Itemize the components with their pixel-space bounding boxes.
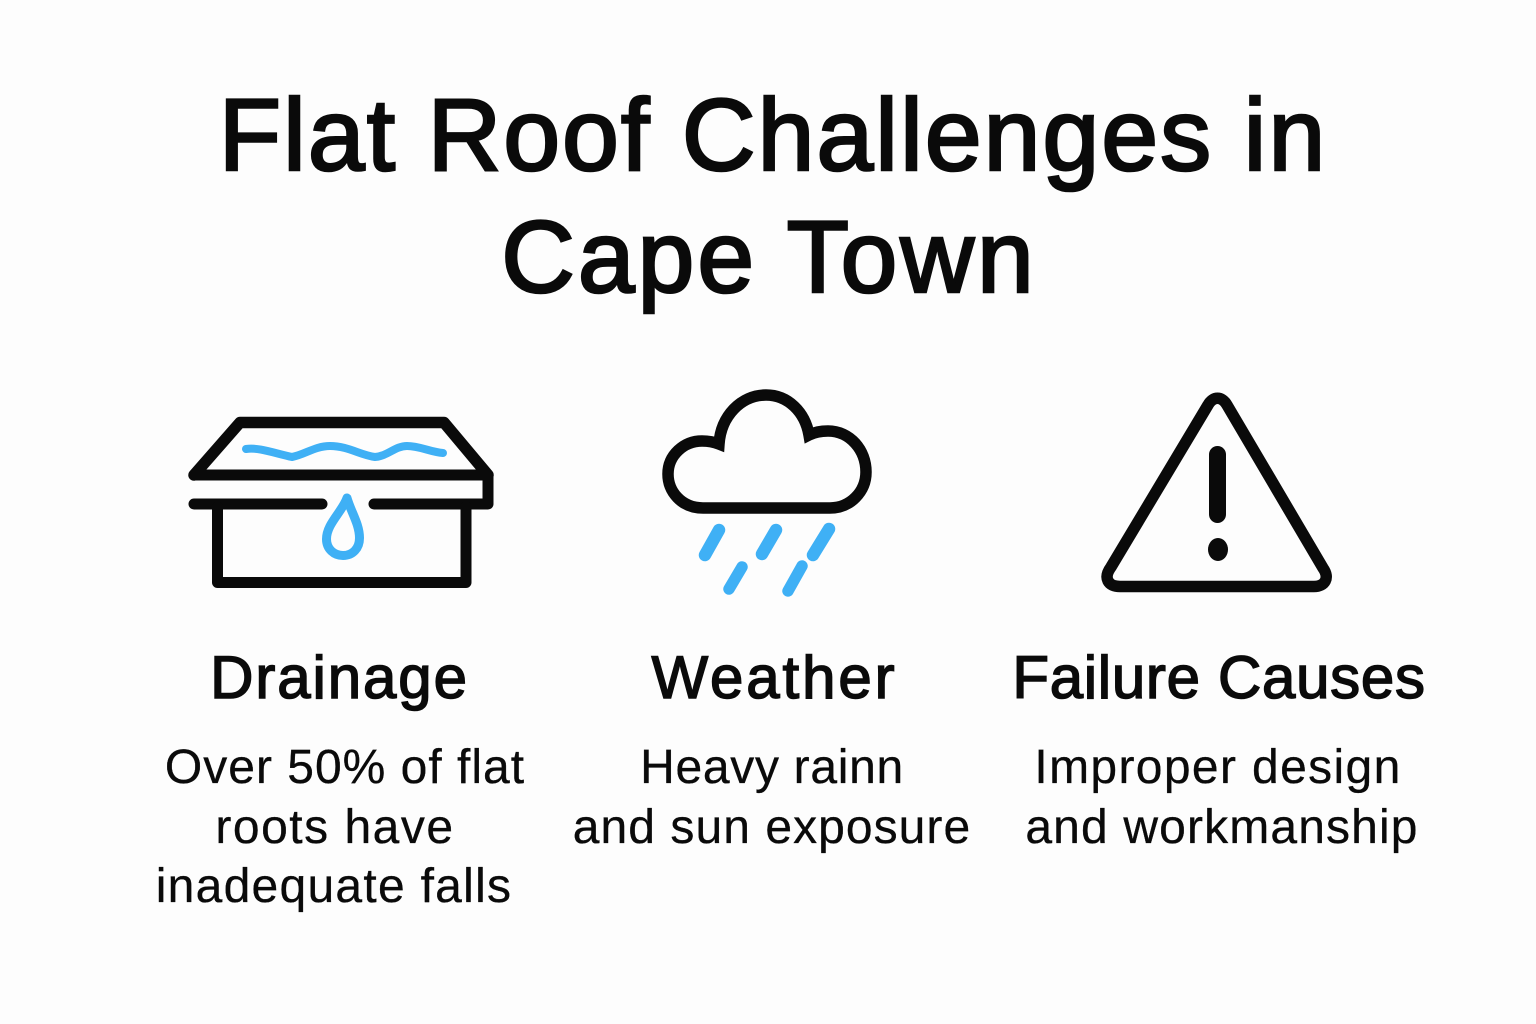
- text: failure causes description: [1025, 741, 1419, 854]
- text: weather description: [573, 741, 971, 854]
- heading: drainage: Drainage: [210, 644, 469, 711]
- icon: warning triangle: [1107, 398, 1326, 586]
- title: [219, 78, 1327, 314]
- title: Flat Roof Challenges in: [219, 78, 1327, 192]
- text: failure causes description: and workmanship: [1025, 800, 1419, 854]
- text: drainage description: inadequate falls: [156, 860, 512, 913]
- heading: weather: Weather: [652, 644, 897, 711]
- icon: rain cloud: [668, 395, 866, 591]
- panel: drainage: [156, 644, 525, 913]
- text: weather description: and sun exposure: [573, 800, 971, 854]
- icon: flat roof with pooled water and drip: [194, 422, 488, 582]
- title: Cape Town: [501, 200, 1037, 314]
- text: drainage description: [156, 741, 525, 913]
- text: drainage description: roots have: [215, 800, 455, 854]
- text: failure causes description: Improper design: [1034, 741, 1402, 794]
- heading: failure causes: Failure Causes: [1012, 644, 1426, 711]
- text: weather description: Heavy rainn: [640, 741, 904, 794]
- panel: weather: [573, 644, 971, 854]
- panel: failure causes: [1012, 644, 1426, 854]
- text: drainage description: Over 50% of flat: [165, 741, 525, 794]
